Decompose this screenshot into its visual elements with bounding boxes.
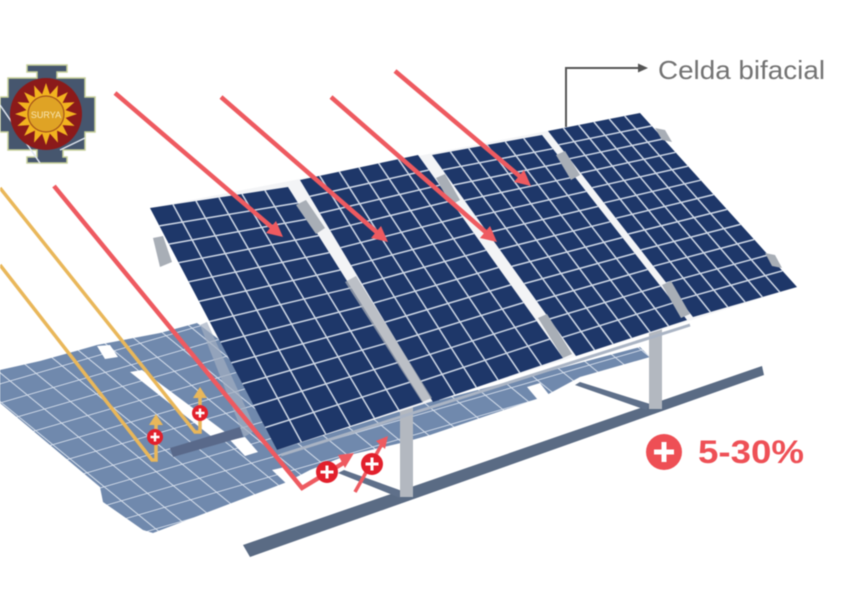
left strut — [200, 322, 256, 437]
red sun ray arrow 4 — [395, 71, 531, 186]
logo centre — [28, 96, 64, 132]
panel clamps — [153, 128, 782, 402]
lower frame lip — [281, 325, 690, 455]
red ray reflected from ground — [54, 186, 354, 488]
ground shadow of the panels — [0, 323, 650, 533]
logo frame — [0, 65, 95, 163]
support structure — [170, 322, 764, 557]
solar panel 1 — [150, 187, 423, 450]
logo sun — [15, 83, 77, 145]
rear beam shadows — [338, 382, 650, 498]
red sun ray arrow 2 — [221, 97, 388, 242]
logo disc — [10, 78, 82, 150]
ground rail — [243, 366, 764, 557]
front post — [400, 405, 413, 497]
logo: Surya — [0, 65, 95, 163]
gain value: 5-30% — [698, 434, 804, 470]
icon: plus circle — [646, 434, 682, 470]
red sun ray arrow 3 — [331, 97, 497, 242]
yellow ray with reflection gain 2 — [0, 265, 163, 460]
logo frame streak — [0, 105, 85, 163]
solar panel 3 — [432, 135, 687, 356]
logo text: SURYA — [31, 110, 61, 120]
solar panel 2 — [300, 155, 563, 402]
rear post — [649, 325, 662, 409]
leader arrow to label — [566, 64, 648, 127]
panel mount backing — [150, 113, 797, 450]
second reflected red ray — [355, 436, 388, 492]
label: Celda bifacial: Celda bifacial — [658, 55, 825, 85]
red sun ray arrow 1 — [115, 93, 283, 237]
low cross beam — [170, 427, 243, 457]
solar panel 4 — [548, 113, 797, 317]
yellow ray with reflection gain 1 — [0, 188, 208, 432]
